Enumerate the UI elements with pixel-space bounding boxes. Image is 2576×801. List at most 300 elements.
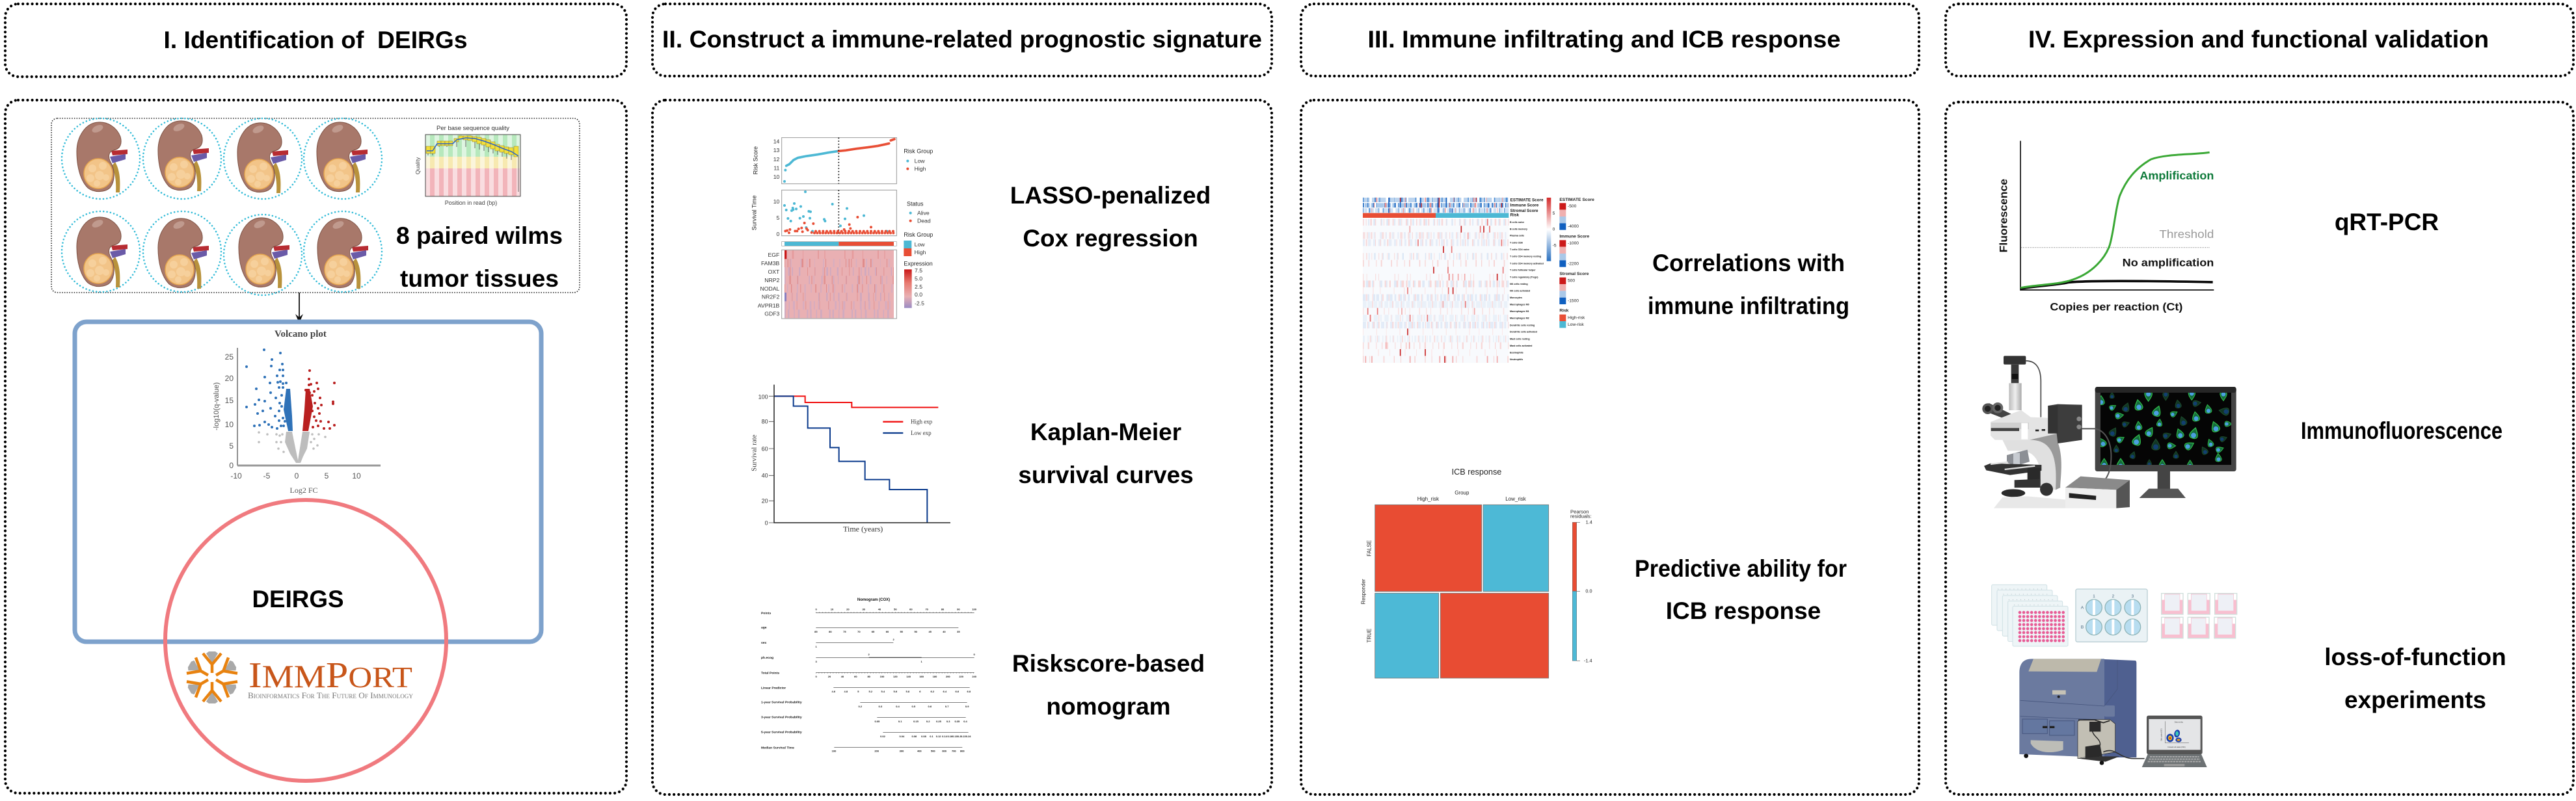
risk score plot: 2.5 [915,283,922,290]
6-well plate [2076,589,2147,642]
nomogram: 500 [931,750,935,753]
nomogram: 0.22 [961,735,967,738]
method labels II: nomogram [1046,693,1171,720]
risk score plot: NR2F2 [762,294,780,300]
annotation legends: -4000 [1568,224,1579,229]
nomogram: 6.8 [967,690,971,693]
nomogram: 6.2 [931,690,935,693]
nomogram: 40 [878,608,881,611]
volcano plot: 0 [229,461,234,470]
annotation legends: 500 [1568,279,1575,283]
sample label: tumor tissues [400,265,559,292]
header box III: III. Immune infiltrating and ICB response [1367,26,1841,53]
cell-type row labels: T cells CD8 [1510,242,1523,244]
per base sequence quality chart: Position in read (bp) [445,200,497,206]
method labels IV: loss-of-function [2324,644,2506,670]
method labels II: LASSO-penalized [1010,182,1211,209]
method labels IV: experiments [2344,687,2486,713]
differential expression box [75,322,541,642]
method labels II: survival curves [1018,462,1194,488]
header box I [5,4,626,77]
method labels II: Cox regression [1023,225,1198,252]
6-well plate: A [2081,605,2084,610]
nomogram: 140 [906,675,911,678]
ICB response mosaic plot: FALSE [1367,540,1373,557]
annotation legends: High-risk [1568,316,1585,321]
colour scale: -5 [1553,244,1557,248]
nomogram: 0 [816,675,818,678]
risk score plot: OXT [768,269,780,275]
annotation legends: Low-risk [1568,322,1584,327]
cell-type row labels: Mast cells resting [1510,338,1530,341]
panel III: immune infiltrating and ICB response [1301,4,1919,794]
nomogram: 0 [816,608,818,611]
nomogram: 75 [843,630,846,633]
body frame III [1301,100,1919,794]
nomogram: 6 [919,690,921,693]
volcano plot: -log10(q-value) [213,382,221,430]
cell-type row labels: Mast cells activated [1510,345,1532,347]
nomogram: 50 [894,608,897,611]
cell-type row labels: Macrophages M1 [1510,310,1529,313]
tissue samples block [51,118,580,295]
nomogram: 0.35 [954,720,960,723]
risk score plot: NODAL [760,285,780,292]
body frame I [5,100,626,793]
risk score plot: NRP2 [764,277,780,283]
annotation legends: -1500 [1568,299,1579,304]
nomogram: 220 [959,675,964,678]
volcano plot [213,329,381,495]
ImmPort logo [185,651,413,703]
Kaplan-Meier survival curves: 40 [762,473,768,479]
nomogram: 160 [919,675,924,678]
risk score plot: Low [915,158,925,164]
method labels IV [2301,209,2506,713]
nomogram: 0.15 [913,720,919,723]
nomogram: 0.05 [874,720,880,723]
cell-type row labels: Eosinophils [1510,352,1523,354]
risk score plot: Risk Group [904,148,933,155]
nomogram: 60 [854,675,857,678]
immune infiltration heatmap: ESTIMATE Score [1510,198,1544,203]
nomogram: Points [761,612,771,616]
nomogram: 0.02 [880,735,886,738]
ICB response mosaic plot: Group [1455,490,1469,496]
Kaplan-Meier survival curves [750,385,950,533]
immune infiltration heatmap: Immune Score [1510,204,1539,208]
volcano plot: -5 [263,471,271,480]
ICB response mosaic plot: -1.4 [1584,658,1592,664]
nomogram: 3 [816,660,818,663]
risk annotation row [1363,213,1436,218]
qRT-PCR amplification chart [1997,141,2214,313]
volcano plot: 5 [229,441,234,451]
qRT-PCR amplification chart: Threshold [2159,228,2214,241]
nomogram: 60 [909,608,913,611]
annotation legends: Risk [1559,309,1569,313]
risk score plot: GDF3 [764,311,780,317]
colour scale [1547,198,1557,261]
6-well plate: 2 [2112,594,2114,599]
nomogram: 0.2 [958,735,961,738]
expression heatmap [782,250,896,319]
ICB response mosaic plot: 0.0 [1585,588,1592,594]
header box II: II. Construct a immune-related prognostic signature [662,26,1262,53]
6-well plate: 1 [2093,594,2095,599]
Kaplan-Meier survival curves: Survival rate [750,434,758,471]
nomogram: 2 [868,653,870,656]
nomogram: 200 [874,750,879,753]
nomogram: 0 [974,653,976,656]
6-well plate: 3 [2131,594,2134,599]
nomogram: 0.4 [896,705,900,708]
risk score plot [751,138,933,319]
nomogram: 0.24 [966,735,971,738]
nomogram: 6.6 [956,690,959,693]
nomogram: 55 [900,630,904,633]
loss-of-function experiment icons [1992,584,2237,767]
nomogram: 120 [893,675,898,678]
grey non-significant points [258,431,327,463]
nomogram: 45 [928,630,932,633]
immune infiltration heatmap: Risk [1510,213,1520,218]
cell-type row labels: Neutrophils [1510,358,1523,361]
Kaplan-Meier survival curves: 0 [765,519,768,526]
cell-type row labels: T cells CD4 memory activated [1510,262,1544,265]
nomogram: 5 [857,690,859,693]
panel IV: expression and functional validation [1946,4,2573,794]
nomogram [761,598,977,753]
6-well plate: B [2081,625,2084,630]
ICB response mosaic plot: residuals: [1570,514,1592,519]
nomogram: 1-year Survival Probability [761,701,802,705]
header box IV [1946,4,2573,76]
risk score plot: Expression [904,261,933,267]
nomogram: 20 [846,608,850,611]
method labels II: Kaplan-Meier [1030,419,1181,445]
nomogram: 0.04 [899,735,905,738]
annotation legends: Stromal Score [1559,272,1589,276]
volcano plot: 10 [352,471,361,480]
Kaplan-Meier survival curves: 20 [762,498,768,505]
method labels III: ICB response [1666,597,1821,624]
nomogram: 1 [816,645,818,648]
nomogram: 40 [943,630,946,633]
volcano plot: 0 [295,471,299,480]
Kaplan-Meier survival curves: Low exp [911,430,932,436]
nomogram: 400 [917,750,922,753]
nomogram: Linear Predictor [761,687,786,690]
ICB response mosaic plot: 1.4 [1586,519,1592,525]
red up-regulated points [302,369,336,431]
method labels III: immune infiltrating [1648,293,1849,319]
nomogram: 5.6 [894,690,898,693]
Kaplan-Meier survival curves: 80 [762,419,768,425]
cell-type row labels: T cells follicular helper [1510,269,1536,272]
risk score plot: Survival Time [751,195,757,230]
nomogram: 240 [972,675,977,678]
nomogram: 85 [814,630,818,633]
nomogram: 1 [921,660,923,663]
risk score plot: 0.0 [915,291,922,298]
risk score plot: 5.0 [915,276,922,282]
risk score plot: Low [915,241,925,248]
nomogram: 5.4 [881,690,885,693]
risk score plot: Alive [917,210,930,217]
risk score plot: 10 [773,174,780,180]
Kaplan-Meier survival curves: High exp [911,419,933,425]
nomogram: 35 [957,630,960,633]
risk score plot: Dead [917,218,931,224]
ICB response mosaic plot: Responder [1360,579,1366,605]
nomogram: 700 [952,750,956,753]
nomogram: 65 [872,630,875,633]
risk score plot: High [915,166,926,172]
method labels II [1010,182,1211,720]
nomogram: 20 [828,675,831,678]
nomogram: 0.06 [911,735,917,738]
nomogram: 4.8 [844,690,848,693]
nomogram: 0.9 [965,705,969,708]
volcano plot: 5 [325,471,329,480]
nomogram: 200 [946,675,950,678]
cell-type row labels: Dendritic cells activated [1510,331,1537,334]
nomogram: 0.3 [879,705,883,708]
volcano plot: 15 [225,396,234,405]
arrow [295,293,303,323]
nomogram: 70 [925,608,929,611]
cell-type row labels: Dendritic cells resting [1510,324,1535,326]
header box III [1301,4,1919,76]
nomogram: 90 [957,608,960,611]
ICB response mosaic plot: Pearson [1570,509,1589,515]
nomogram: 0.4 [963,720,968,723]
blue down-regulated points [245,348,293,431]
Kaplan-Meier survival curves: 100 [758,393,768,400]
nomogram: 0.6 [928,705,932,708]
risk score plot: 10 [773,198,780,205]
risk score plot: High [915,249,926,256]
nomogram: 100 [832,750,837,753]
monitor with cells [2095,387,2236,498]
nomogram: 0.12 [936,735,941,738]
cell-type row labels: T cells CD4 memory resting [1510,256,1541,258]
nomogram: 80 [867,675,871,678]
transwell cups [2162,594,2237,638]
risk score plot: Status [907,201,924,207]
volcano plot: 20 [225,374,234,383]
cell-type row labels: Macrophages M0 [1510,304,1529,306]
risk score plot: EGF [768,252,779,258]
volcano plot: Log2 FC [289,486,318,495]
nomogram: 600 [942,750,947,753]
nomogram: 2 [893,638,895,641]
annotation legends: -1000 [1568,241,1579,246]
cell-type row labels: Plasma cells [1510,235,1524,237]
nomogram: 800 [960,750,965,753]
method labels III [1635,250,1849,624]
laptop with flow plot: Data overlay [2175,721,2184,723]
header box IV: IV. Expression and functional validation [2028,26,2489,53]
laptop with flow plot [2142,716,2207,767]
risk score plot: 14 [773,138,780,144]
sample label: 8 paired wilms [396,222,563,249]
nomogram: 180 [933,675,937,678]
nomogram: age [761,626,767,630]
immune infiltration heatmap [1363,198,1594,363]
volcano plot: 10 [225,420,234,429]
ICB response mosaic plot: ICB response [1452,467,1501,477]
panel I: identification of DEIRGs [5,4,626,793]
control box [2065,477,2130,508]
nomogram: 70 [857,630,861,633]
nomogram: 100 [972,608,977,611]
ICB response mosaic plot: Low_risk [1505,496,1526,502]
method labels II: Riskscore-based [1012,650,1205,677]
nomogram: Total Points [761,672,779,676]
nomogram: Median Survival Time [761,746,794,750]
nomogram: ph.ecog [761,656,773,660]
risk score plot: Risk Score [752,146,758,174]
laptop with flow plot: Side scatter (SSC) [2161,728,2163,741]
nomogram: 0.5 [912,705,916,708]
nomogram: 5.2 [869,690,873,693]
ImmPort logo: IMMPORT [248,655,412,696]
DEIRGS label: DEIRGS [252,586,343,612]
method labels IV: qRT-PCR [2335,209,2439,235]
nomogram: 5-year Survival Probability [761,731,802,735]
nomogram: 0.25 [936,720,942,723]
risk score plot: AVPR1B [758,302,780,309]
annotation legends: ESTIMATE Score [1559,198,1594,202]
ICB response mosaic plot: TRUE [1367,629,1373,643]
risk score plot: FAM3B [761,260,780,267]
risk score plot: -2.5 [915,300,924,306]
laptop with flow plot: Forward cell scatter (FSC) [2167,746,2186,748]
immunofluorescence microscope setup [1982,356,2236,508]
qRT-PCR amplification chart: Copies per reaction (Ct) [2050,300,2182,313]
immune infiltration heatmap: Stromal Score [1510,209,1538,213]
nomogram: 6.4 [943,690,947,693]
sample label [396,222,563,292]
header box II [652,4,1272,76]
volcano plot: -10 [230,471,242,480]
nomogram: Nomogram (COX) [857,598,890,602]
cell-type row labels: T cells regulatory (Tregs) [1510,276,1538,279]
risk score plot: 12 [773,156,780,163]
nomogram: sex [761,641,767,645]
method labels III: Correlations with [1652,250,1845,276]
Kaplan-Meier survival curves: Time (years) [843,524,883,533]
volcano plot: Volcano plot [275,329,327,339]
qRT-PCR amplification chart: Fluorescence [1997,179,2009,252]
Kaplan-Meier survival curves: 60 [762,445,768,452]
nomogram: 0.16 [947,735,953,738]
annotation legends: -2200 [1568,261,1579,266]
score annotation rows [1363,198,1509,213]
cell-type row labels: NK cells resting [1510,283,1528,285]
nomogram: 40 [841,675,844,678]
nomogram: 0.2 [926,720,930,723]
kidney tumor icons [62,118,382,295]
microscope body [1982,356,2065,508]
cell-type row labels: B cells naive [1510,221,1524,224]
colour scale: 5 [1553,211,1555,216]
body frame IV [1946,102,2573,794]
method labels III: Predictive ability for [1635,555,1847,582]
nomogram: 300 [900,750,904,753]
nomogram: 100 [880,675,885,678]
cell-type row labels: Macrophages M2 [1510,317,1529,320]
cell-type row labels: T cells CD4 naive [1510,248,1529,251]
icon: ImmPort star [185,651,239,703]
per base sequence quality chart: Per base sequence quality [436,125,509,132]
nomogram: 0.1 [898,720,902,723]
colour scale: 0 [1553,228,1555,232]
nomogram: 0.14 [942,735,948,738]
qRT-PCR amplification chart: Amplification [2140,169,2214,182]
cell-type heatmap body [1363,219,1509,363]
nomogram: 60 [886,630,889,633]
panel II: prognostic signature [652,4,1272,794]
fluorescence light box [2048,404,2111,479]
nomogram: 80 [941,608,945,611]
nomogram: 50 [914,630,918,633]
volcano plot: 25 [225,352,234,361]
per base sequence quality chart [414,125,520,206]
risk score plot: Risk Group [904,231,933,238]
nomogram: 3-year Survival Probability [761,716,802,720]
ImmPort logo: Bioinformatics For The Future Of Immunology [248,690,413,700]
nomogram: 0.08 [921,735,927,738]
ICB response mosaic plot: High_risk [1417,496,1439,502]
risk score plot: 5 [777,215,780,221]
nomogram: 4.6 [832,690,836,693]
cell-type row labels: NK cells activated [1510,290,1530,293]
per base sequence quality chart: Quality [414,157,421,174]
nomogram: 10 [831,608,834,611]
header box I: I. Identification of DEIRGs [164,27,467,53]
risk score plot: 7.5 [915,267,922,274]
nomogram: 80 [829,630,832,633]
annotation legends: -500 [1568,204,1577,209]
risk score plot: 0 [777,231,780,237]
cell-type row labels [1510,221,1544,361]
96-well plates [1992,584,2068,646]
ImmPort circle [165,500,446,781]
cell-type row labels: Monocytes [1510,296,1522,299]
nomogram: 0.1 [930,735,934,738]
risk score plot: 11 [773,164,780,171]
nomogram: 5.8 [906,690,910,693]
risk group bar [782,242,896,246]
annotation legends [1559,198,1594,328]
nomogram: 0.18 [952,735,958,738]
method labels IV: Immunofluorescence [2301,417,2502,444]
flow cytometer [2019,659,2145,765]
cell-type row labels: B cells memory [1510,228,1528,231]
nomogram: 0.2 [859,705,863,708]
annotation legends: Immune Score [1559,235,1589,239]
nomogram: 30 [862,608,866,611]
body frame II [652,100,1272,794]
qRT-PCR amplification chart: No amplification [2123,256,2214,269]
ICB response mosaic plot [1360,467,1592,678]
nomogram: 0.3 [946,720,950,723]
risk score plot: 13 [773,147,780,153]
nomogram: 0.7 [945,705,949,708]
